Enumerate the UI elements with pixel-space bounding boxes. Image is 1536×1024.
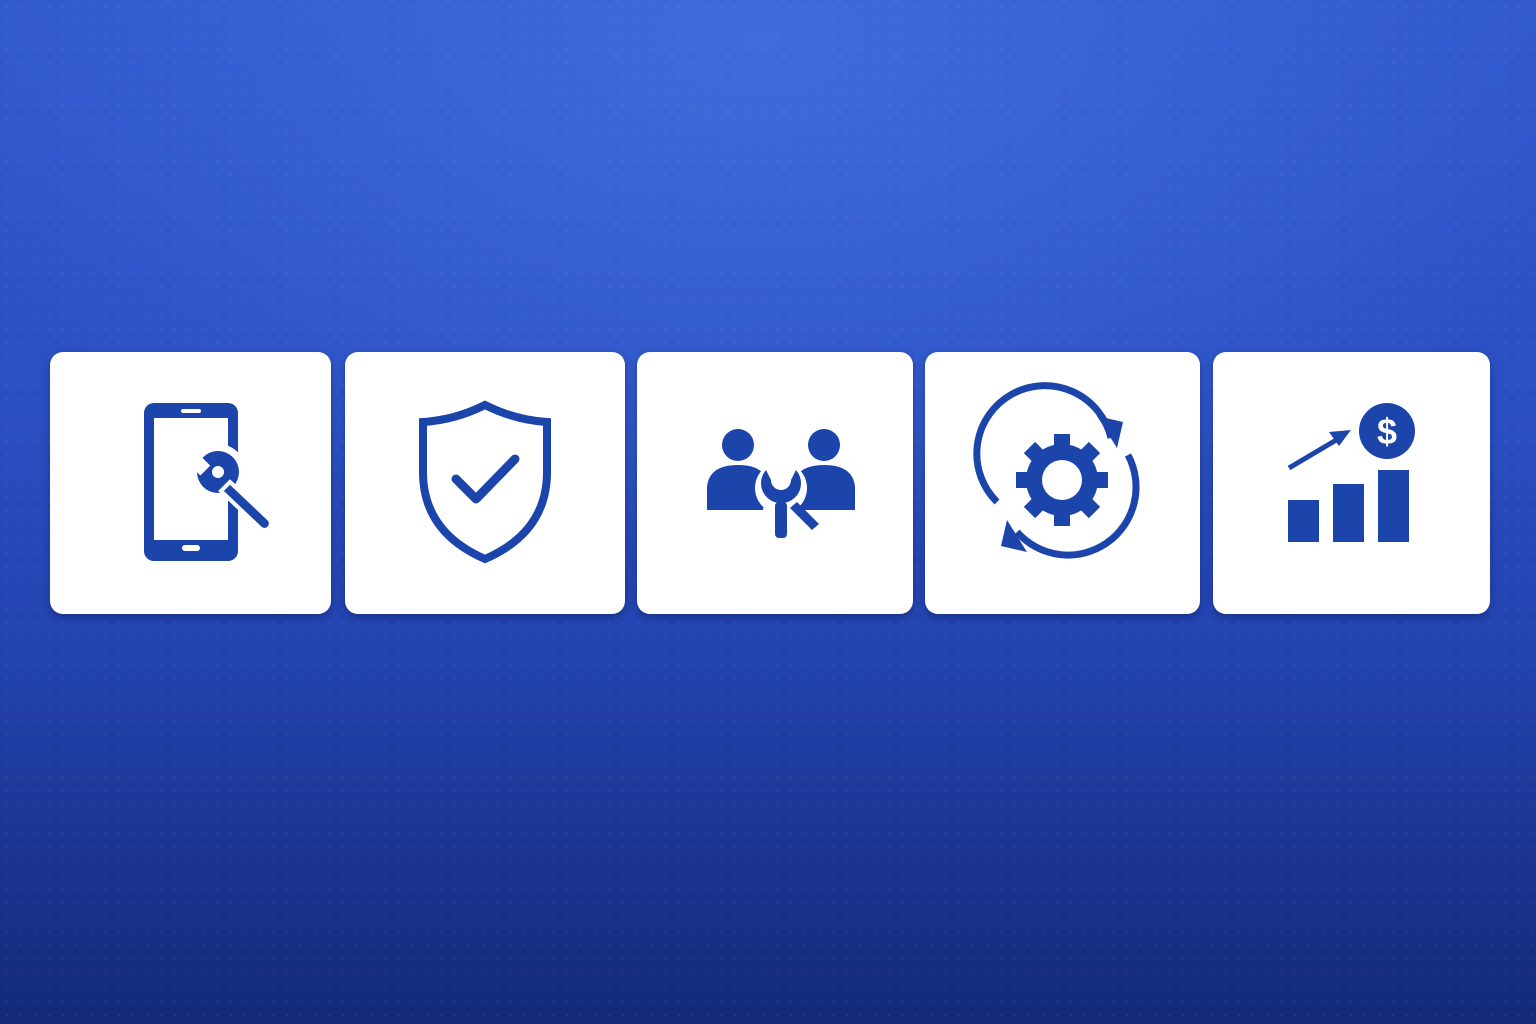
icon: bar chart with dollar <box>1288 403 1415 542</box>
card: team support <box>637 352 913 614</box>
card: shield <box>345 352 625 614</box>
icon: people with wrench <box>707 429 855 538</box>
card: growth <box>1213 352 1490 614</box>
icon: shield check <box>419 400 551 564</box>
icon: bar chart with dollar: $ <box>1377 411 1397 452</box>
icon: gear with cycle arrows <box>973 382 1140 559</box>
icon: phone with wrench <box>144 403 269 561</box>
card: process gear <box>925 352 1200 614</box>
card: mobile repair <box>50 352 331 614</box>
